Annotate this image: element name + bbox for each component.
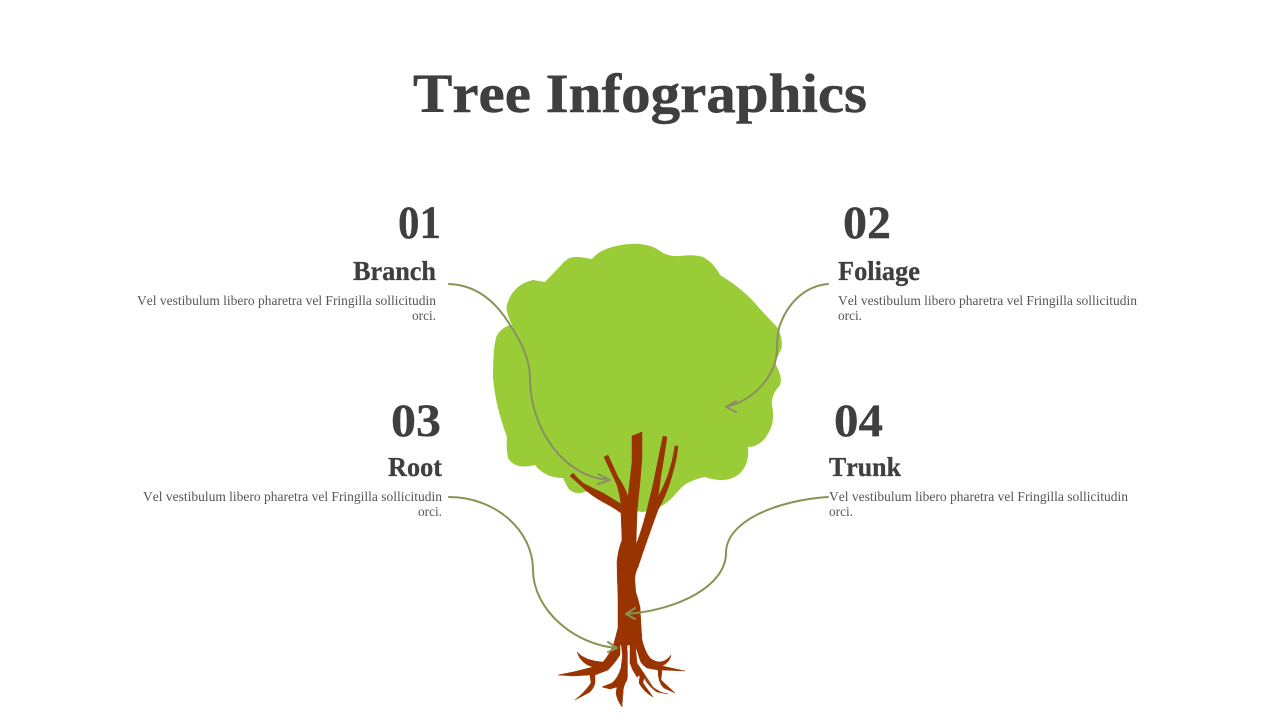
heading root: Root <box>388 452 442 482</box>
item 01: branch <box>137 197 441 323</box>
description: Vel vestibulum libero pharetra vel Fringilla sollicitudin <box>829 489 1128 504</box>
number 03: 03 <box>391 395 441 447</box>
arrow: foliage <box>726 284 828 412</box>
description: orci. <box>829 504 853 519</box>
centre root <box>602 642 628 707</box>
number 01: 01 <box>398 197 441 249</box>
title: Tree Infographics <box>413 63 867 124</box>
item 02: foliage <box>838 197 1137 323</box>
trunk and branches <box>570 432 678 595</box>
item 03: root <box>143 395 442 519</box>
heading branch: Branch <box>353 256 436 286</box>
description: Vel vestibulum libero pharetra vel Fringilla sollicitudin <box>137 293 436 308</box>
description: Vel vestibulum libero pharetra vel Fringilla sollicitudin <box>838 293 1137 308</box>
arrow: trunk <box>626 497 828 619</box>
item 04: trunk <box>829 395 1128 519</box>
heading trunk: Trunk <box>829 452 901 482</box>
number 04: 04 <box>834 395 883 447</box>
root highlights <box>622 650 655 705</box>
foliage <box>493 244 782 512</box>
heading foliage: Foliage <box>838 256 920 286</box>
arrow: branch <box>449 284 610 484</box>
description: orci. <box>418 504 442 519</box>
right inner root <box>630 642 668 697</box>
description: orci. <box>412 308 436 323</box>
tree illustration <box>493 244 782 707</box>
arrow: root <box>449 497 617 652</box>
description: Vel vestibulum libero pharetra vel Fringilla sollicitudin <box>143 489 442 504</box>
number 02: 02 <box>843 197 891 249</box>
main roots <box>558 590 685 700</box>
description: orci. <box>838 308 862 323</box>
